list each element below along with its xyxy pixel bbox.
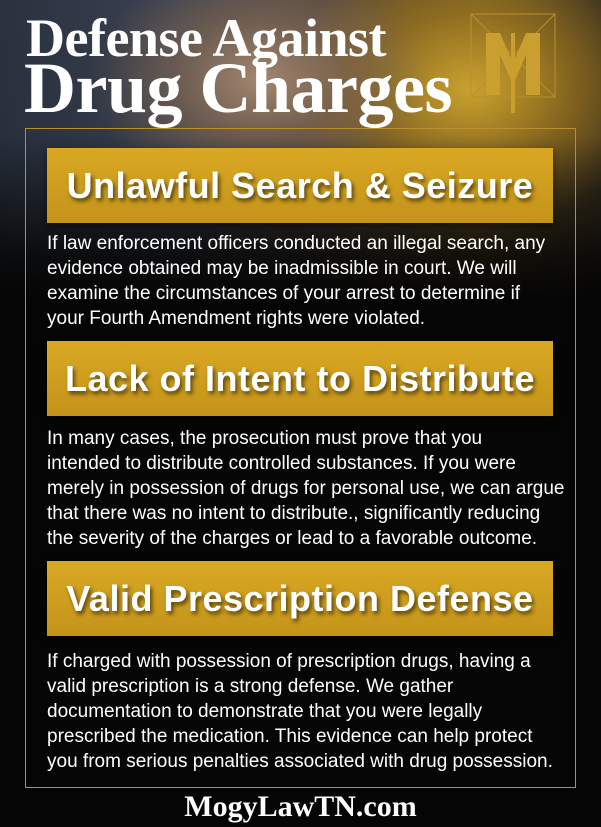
text: search: If law enforcement officers conducted an illegal search, any (47, 233, 545, 254)
text: intent: intended to distribute controlled substances. If you were (47, 453, 516, 474)
panel frame (25, 128, 576, 788)
title: Defense Against (26, 8, 386, 68)
text: prescription: documentation to demonstrate that you were legally (47, 701, 482, 722)
text: search: examine the circumstances of your arrest to determine if (47, 283, 520, 304)
banner: unlawful search: Unlawful Search & Seizure (67, 165, 533, 206)
text: prescription: If charged with possession of prescription drugs, having a (47, 651, 531, 672)
footer url: MogyLawTN.com (184, 790, 417, 823)
text: search (47, 233, 546, 329)
text: intent (47, 428, 564, 549)
text: prescription: you from serious penalties associated with drug possession. (47, 751, 553, 772)
text: intent: In many cases, the prosecution must prove that you (47, 428, 482, 449)
banner: intent (47, 341, 553, 416)
text: prescription: prescribed the medication. This evidence can help protect (47, 726, 532, 747)
text: search: evidence obtained may be inadmissible in court. We will (47, 258, 517, 279)
banner: prescription (47, 561, 553, 636)
text: intent: merely in possession of drugs for personal use, we can argue (47, 478, 564, 499)
banner: unlawful search (47, 148, 553, 223)
banner: intent: Lack of Intent to Distribute (65, 358, 535, 399)
text: search: your Fourth Amendment rights were violated. (47, 308, 425, 329)
title line 2: Drug Charges (24, 48, 452, 128)
banner: prescription: Valid Prescription Defense (66, 578, 534, 619)
text: prescription: valid prescription is a strong defense. We gather (47, 676, 453, 697)
text: intent: the severity of the charges or lead to a favorable outcome. (47, 528, 537, 549)
icon: logo (470, 14, 556, 113)
text: intent: that there was no intent to distribute., significantly reducing (47, 503, 540, 524)
text: prescription (47, 651, 553, 772)
